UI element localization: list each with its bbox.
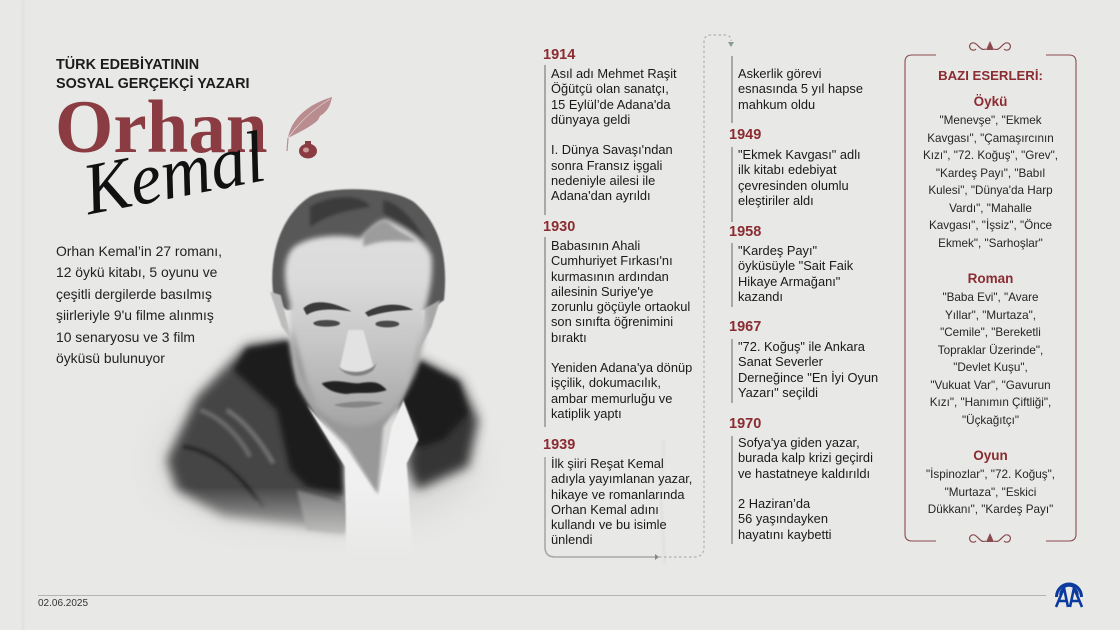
text 1930: son sınıfta öğrenimini — [551, 314, 673, 329]
intro paragraph: 12 öykü kitabı, 5 oyunu ve — [56, 264, 217, 280]
text 1939: kullandı ve bu isimle — [551, 517, 667, 532]
text 1914: 15 Eylül’de Adana'da — [551, 96, 671, 112]
text 1970 — [738, 435, 873, 542]
bar 1949 — [731, 147, 733, 222]
text 1930: ailesinin Suriye'ye — [551, 284, 653, 299]
list Öykü: Ekmek", "Sarhoşlar" — [938, 236, 1043, 250]
text 1958: kazandı — [738, 289, 783, 304]
year 1958: 1958 — [729, 224, 761, 240]
text 1930 — [551, 238, 692, 421]
text 1939: İlk şiiri Reşat Kemal — [551, 456, 664, 471]
text 1939: hikaye ve romanlarında — [551, 486, 685, 502]
category Öykü: Öykü — [974, 94, 1007, 109]
text 1939: adıyla yayımlanan yazar, — [551, 471, 692, 486]
text 1970: 2 Haziran’da — [738, 496, 810, 511]
bar 1930 — [544, 237, 546, 427]
year 1930: 1930 — [543, 219, 575, 235]
intro paragraph: 10 senaryosu ve 3 film — [56, 329, 195, 345]
year 1967: 1967 — [729, 319, 761, 335]
title: Orhan: Orhan — [55, 86, 268, 169]
year 1939: 1939 — [543, 437, 575, 453]
text 1970: ve hastatneye kaldırıldı — [738, 466, 870, 480]
text 1967: Sanat Severler — [738, 354, 823, 369]
list Öykü: Kavgası", "Çamaşırcının — [927, 132, 1054, 144]
text military: mahkum oldu — [738, 96, 815, 112]
text 1914: Asıl adı Mehmet Raşit — [551, 66, 677, 81]
category Roman: Roman — [968, 271, 1013, 286]
text 1967: Derneğince "En İyi Oyun — [738, 370, 878, 384]
list Öykü: "Menevşe", "Ekmek — [939, 114, 1042, 127]
text 1949: ilk kitabı edebiyat — [738, 162, 837, 177]
bar continuation — [731, 56, 733, 123]
text 1930: zorunlu göçüyle ortaokul — [551, 299, 690, 314]
bar 1958 — [731, 243, 733, 307]
text 1930: ambar memurluğu ve — [551, 390, 672, 406]
list Oyun: "İspinozlar", "72. Koğuş", — [926, 468, 1055, 481]
text 1930: Babasının Ahali — [551, 238, 640, 253]
text 1914: Adana'dan ayrıldı — [551, 188, 651, 203]
intro paragraph: Orhan Kemal’in 27 romanı, — [56, 243, 222, 259]
timeline: column one — [543, 47, 692, 547]
list Roman: "Devlet Kuşu", — [953, 361, 1028, 374]
list Oyun: "Murtaza", "Eskici — [945, 486, 1036, 498]
text 1930: kurmasının ardından — [551, 268, 669, 284]
text 1958: "Kardeş Payı" — [738, 243, 817, 258]
footer line — [38, 595, 1046, 596]
list Oyun: Dükkanı", "Kardeş Payı" — [928, 503, 1053, 516]
text 1958: öyküsüyle "Sait Faik — [738, 258, 853, 273]
text 1967: Yazarı" seçildi — [738, 385, 818, 400]
list Roman: "Üçkağıtçı" — [962, 414, 1019, 426]
list Roman: Topraklar Üzerinde", — [938, 344, 1043, 356]
headline — [56, 56, 250, 92]
text 1930: işçilik, dokumacılık, — [551, 375, 661, 390]
text 1939: Orhan Kemal adını — [551, 502, 659, 517]
category Oyun: Oyun — [973, 448, 1008, 463]
text 1914: I. Dünya Savaşı'ndan — [551, 142, 673, 157]
headline: TÜRK EDEBİYATININ — [56, 57, 199, 73]
text 1970: burada kalp krizi geçirdi — [738, 450, 873, 465]
text 1970: 56 yaşındayken — [738, 511, 828, 526]
text 1914 — [551, 66, 677, 203]
text 1914: Öğütçü olan sanatçı, — [551, 81, 669, 96]
text 1970: Sofya'ya giden yazar, — [738, 435, 860, 450]
list Roman — [930, 291, 1051, 426]
bar 1914 — [544, 65, 546, 215]
intro paragraph: öyküsü bulunuyor — [56, 350, 165, 366]
list Roman: "Cemile", "Bereketli — [940, 326, 1041, 339]
text 1967: "72. Koğuş" ile Ankara — [738, 339, 865, 354]
text 1958: Hikaye Armağanı" — [738, 274, 840, 288]
text 1930: bıraktı — [551, 330, 587, 344]
list Roman: Yıllar", "Murtaza", — [945, 308, 1036, 322]
headline: SOSYAL GERÇEKÇİ YAZARI — [56, 76, 250, 92]
timeline: column two — [729, 56, 878, 544]
year 1914: 1914 — [543, 47, 575, 63]
text military — [738, 66, 863, 112]
icon: feather and ink bottle — [286, 97, 332, 158]
text 1967 — [738, 339, 878, 400]
list Öykü: Kulesi", "Dünya'da Harp — [928, 184, 1053, 197]
intro paragraph: çeşitli dergilerde basılmış — [56, 286, 212, 302]
list Roman: Kızı", "Hanımın Çiftliği", — [930, 396, 1051, 409]
text 1970: hayatını kaybetti — [738, 526, 832, 542]
text 1958 — [738, 243, 854, 304]
text 1930: Yeniden Adana'ya dönüp — [551, 360, 692, 375]
list Öykü: Kızı", "72. Koğuş", "Grev", — [923, 149, 1058, 162]
text 1949 — [738, 147, 861, 208]
text 1914: nedeniyle ailesi ile — [551, 173, 655, 188]
text 1939 — [551, 456, 692, 547]
text military: esnasında 5 yıl hapse — [738, 81, 863, 96]
text 1930: katiplik yaptı — [551, 406, 622, 421]
list Roman: "Vukuat Var", "Gavurun — [930, 378, 1051, 392]
intro paragraph: şiirleriyle 9'u filme alınmış — [56, 307, 214, 323]
text military: Askerlik görevi — [738, 66, 822, 81]
text 1939: ünlendi — [551, 532, 592, 547]
intro paragraph — [56, 243, 222, 366]
text 1930: Cumhuriyet Fırkası'nı — [551, 253, 673, 268]
list Öykü: Kavgası", "İşsiz", "Önce — [929, 219, 1052, 232]
text 1949: "Ekmek Kavgası" adlı — [738, 147, 861, 162]
text 1949: çevresinden olumlu — [738, 178, 849, 192]
bar 1967 — [731, 339, 733, 403]
list Öykü: Vardı", "Mahalle — [949, 202, 1032, 214]
date: 02.06.2025 — [38, 598, 88, 609]
list Öykü — [923, 114, 1058, 250]
list Öykü: "Kardeş Payı", "Babıl — [936, 166, 1045, 180]
bar 1970 — [731, 436, 733, 544]
title: Kemal script: Kemal — [77, 117, 271, 231]
text 1914: sonra Fransız işgali — [551, 158, 662, 172]
text 1914: dünyaya geldi — [551, 112, 630, 127]
text 1949: eleştiriler aldı — [738, 193, 814, 208]
list Roman: "Baba Evi", "Avare — [942, 291, 1039, 304]
icon: AA logo — [1054, 582, 1084, 608]
year 1949: 1949 — [729, 127, 761, 143]
panel heading: BAZI ESERLERİ: — [938, 68, 1043, 83]
list Oyun — [926, 468, 1055, 516]
year 1970: 1970 — [729, 416, 761, 432]
